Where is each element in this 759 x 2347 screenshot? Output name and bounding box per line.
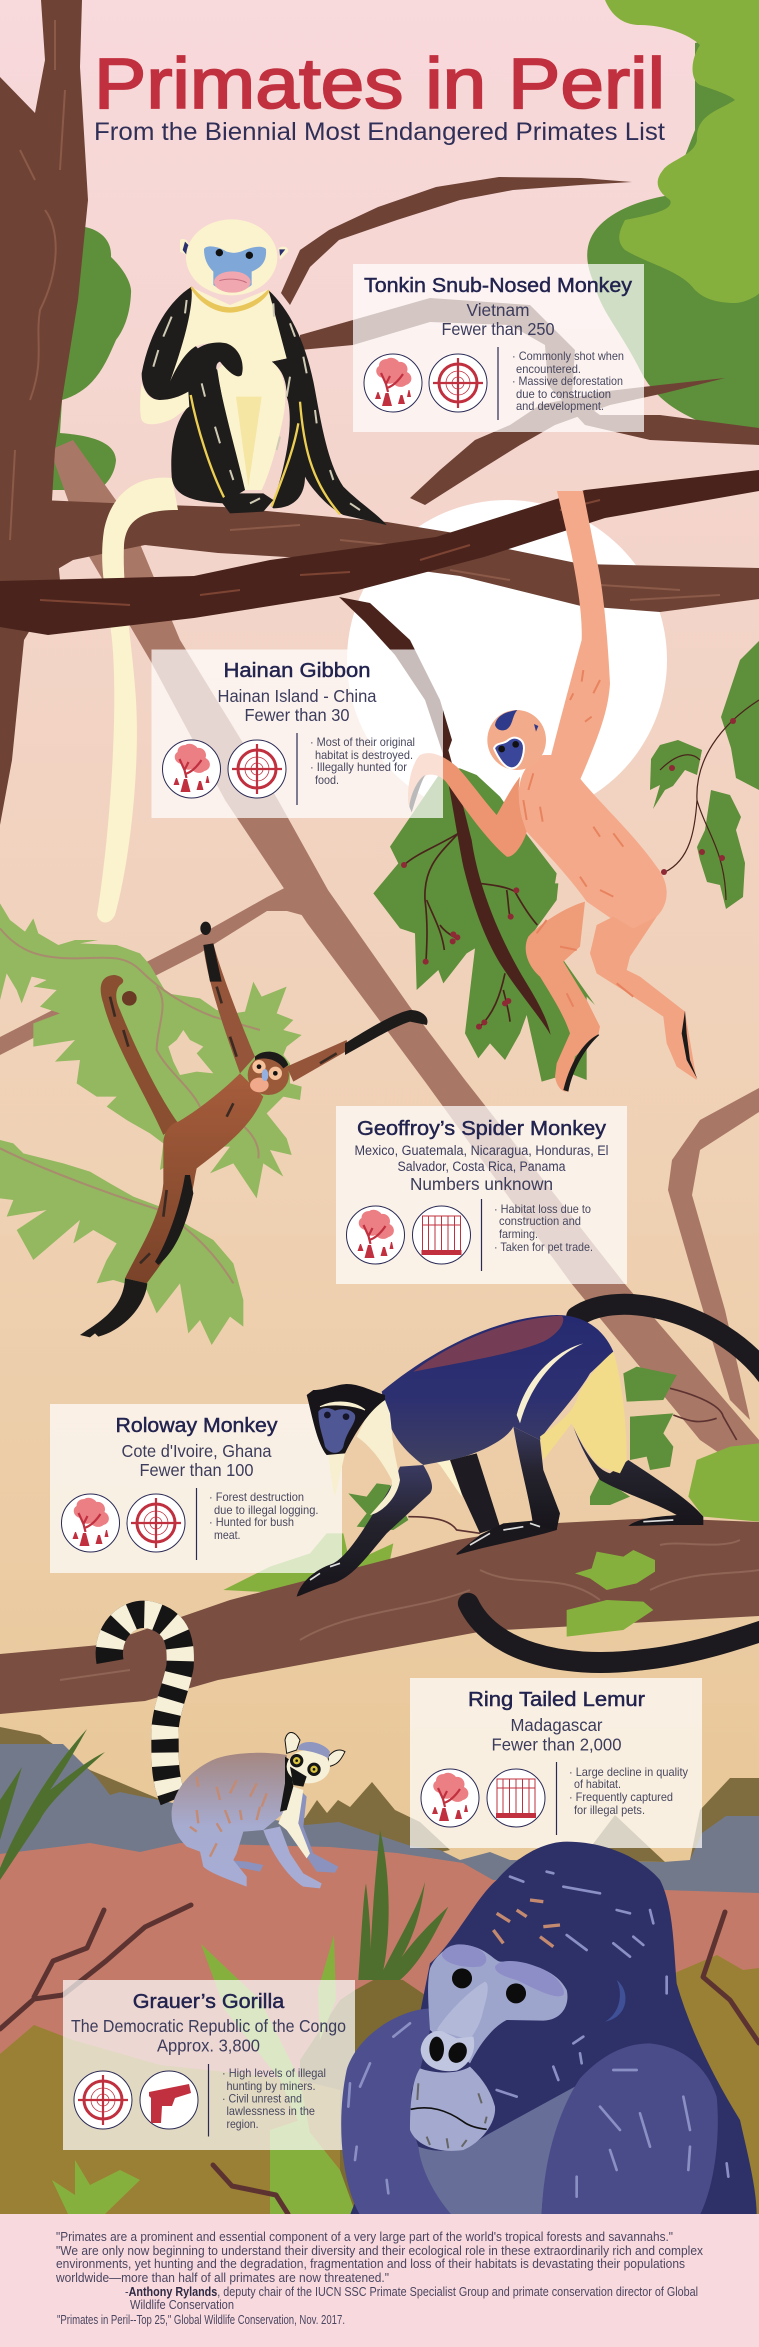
name: Hainan Gibbon [224, 660, 370, 682]
spider black arm [345, 1010, 428, 1055]
footer quote: "Primates are a prominent and essential component of a very large part of the world's tropical forests and savannahs." [56, 2230, 673, 2244]
lemur muzzle [290, 1767, 307, 1787]
ring tailed lemur [109, 1614, 345, 1888]
gibbon nails [409, 775, 697, 1092]
gibbon fur [523, 670, 633, 1007]
gibbon twigs [401, 833, 537, 1030]
location: Hainan Island - China [218, 686, 377, 706]
tree foliage: top right [587, 0, 759, 440]
icon: cage [412, 1206, 470, 1264]
tonkin yellow stripes [191, 395, 340, 514]
threats: · Taken for pet trade. [494, 1240, 593, 1254]
ground: back hills [0, 1727, 759, 1900]
icon: deforestation [62, 1494, 120, 1552]
lemur cap [298, 1742, 330, 1758]
name: Tonkin Snub-Nosed Monkey [364, 275, 632, 297]
lemur ears [285, 1732, 345, 1767]
tonkin eyes [219, 253, 249, 255]
gorilla nose bridge [437, 1982, 488, 2040]
roloway torso [382, 1315, 613, 1465]
roloway white stripe [517, 1343, 583, 1423]
name: Geoffroy’s Spider Monkey [357, 1118, 606, 1140]
gorilla brow [442, 1944, 564, 1996]
roloway white leg strip [433, 1460, 462, 1497]
threats: · Massive deforestation [512, 374, 623, 388]
threats: farming. [499, 1227, 538, 1241]
roloway monkey [297, 1304, 759, 1663]
threats [209, 1490, 318, 1542]
spider raised arm [203, 943, 255, 1073]
gibbon branch [443, 733, 551, 1035]
footer source: "Primates in Peril--Top 25," Global Wildlife Conservation, Nov. 2017. [57, 2313, 345, 2327]
tonkin head [186, 219, 277, 295]
upper branches [281, 177, 759, 505]
roloway yellow rump [540, 1352, 627, 1473]
lemur pupils [297, 1761, 314, 1769]
threats: · Hunted for bush [209, 1515, 294, 1529]
location: Madagascar [510, 1715, 603, 1735]
panel: ring tailed lemur [410, 1678, 702, 1848]
threats [494, 1202, 593, 1254]
right berries stem [660, 700, 759, 900]
gorilla muzzle [410, 2067, 495, 2151]
threats: construction and [499, 1214, 581, 1228]
gorilla mouth [411, 2108, 487, 2129]
title: Primates in Peril [94, 45, 665, 124]
lemur front leg [263, 1827, 322, 1888]
icon: deforestation [364, 354, 422, 412]
panel: tonkin snub-nosed monkey [353, 264, 644, 432]
tree foliage: left [0, 200, 131, 490]
hainan gibbon with leaf cluster [373, 491, 697, 1092]
panel background [410, 1678, 702, 1848]
roloway front arm [297, 1465, 432, 1597]
roloway rear leg [573, 1427, 703, 1526]
gorilla face [428, 1945, 567, 2063]
gibbon crown [495, 710, 517, 730]
footer quote: "We are only now beginning to understand their diversity and their ecological role in these extraordinarily rich and complex [56, 2244, 704, 2258]
tonkin collar [191, 286, 269, 313]
spider black foot [80, 1278, 147, 1337]
panel: roloway monkey [50, 1404, 342, 1573]
ground: olive right [660, 1955, 759, 2214]
main trunk [0, 0, 88, 825]
panel: grauer's gorilla [63, 1980, 355, 2150]
icon: hunting target [127, 1494, 185, 1552]
roloway eyes [327, 1415, 346, 1417]
divider [556, 1762, 558, 1835]
name: Ring Tailed Lemur [468, 1689, 645, 1711]
gorilla ear [605, 1980, 626, 2022]
count: Fewer than 2,000 [492, 1734, 622, 1754]
lemur hind foot [227, 1860, 263, 1872]
light side branches [0, 880, 759, 1420]
lemur collar [280, 1757, 293, 1812]
gibbon eyes [502, 744, 516, 749]
roloway face [318, 1408, 355, 1453]
fern leaves [0, 903, 302, 1345]
gibbon near arm [408, 753, 527, 857]
roloway head [307, 1384, 385, 1455]
subtitle: From the Biennial Most Endangered Primates List [94, 118, 665, 146]
icon: deforestation [346, 1206, 404, 1264]
location: Cote d'Ivoire, Ghana [122, 1441, 272, 1461]
panel background [353, 264, 644, 432]
spider cap [255, 1052, 288, 1068]
footer quote: environments, yet hunting and the degradation, fragmentation and loss of their habitats is devastating their populations [56, 2257, 685, 2271]
tonkin left side black [142, 287, 245, 503]
gibbon back leg [526, 902, 600, 1092]
gorilla head and back [350, 1842, 757, 2215]
tonkin left hand [140, 383, 189, 424]
lemur head [287, 1750, 330, 1783]
threats: of habitat. [574, 1777, 621, 1791]
spider monkey [80, 922, 428, 1337]
icon: hunting target [228, 740, 286, 798]
threats [512, 349, 624, 413]
grauer's gorilla [341, 1842, 757, 2215]
footer quote [55, 2230, 704, 2285]
tonkin right side black [268, 290, 387, 525]
gorilla right arm [542, 2043, 718, 2215]
threats: due to illegal logging. [214, 1503, 318, 1517]
threats: hunting by miners. [226, 2079, 316, 2093]
divider [497, 347, 499, 420]
threats: meat. [214, 1528, 240, 1542]
location [354, 1143, 608, 1174]
threats: region. [226, 2117, 258, 2131]
gibbon face mask [494, 738, 524, 768]
threats: and development. [516, 399, 604, 413]
location: Salvador, Costa Rica, Panama [398, 1159, 566, 1174]
panel background [50, 1404, 342, 1573]
footer attribution [125, 2285, 698, 2312]
threats: · Commonly shot when [512, 349, 624, 363]
spider tail wrap [101, 975, 178, 1135]
name: Roloway Monkey [116, 1415, 278, 1437]
twigs [0, 1905, 759, 2214]
panel background [152, 650, 443, 818]
spider nose [262, 1069, 268, 1081]
right leaves [650, 641, 759, 909]
tonkin belly glow [236, 397, 262, 487]
roloway foot [457, 1513, 558, 1555]
footer attribution: -Anthony Rylands, deputy chair of the IUCN SSC Primate Specialist Group and primate conservation director of Global [125, 2285, 698, 2299]
icon: deforestation [421, 1769, 479, 1827]
lemur body [172, 1753, 290, 1887]
ground: terracotta [0, 1843, 759, 2214]
roloway beard [328, 1453, 345, 1497]
count: Fewer than 100 [140, 1460, 254, 1480]
footer attribution: Wildlife Conservation [130, 2298, 234, 2312]
spider body [125, 1073, 263, 1283]
gorilla muzzle grain [417, 2083, 487, 2148]
threats: · Large decline in quality [569, 1765, 688, 1779]
count: Fewer than 250 [442, 319, 555, 339]
bark on mid branch [230, 525, 720, 600]
roloway far leg [450, 1453, 500, 1533]
sun [347, 500, 667, 820]
tonkin tail [97, 478, 178, 922]
roloway middle leg [513, 1427, 560, 1530]
location: Mexico, Guatemala, Nicaragua, Honduras, El [354, 1143, 608, 1158]
gorilla chest [418, 2078, 590, 2215]
roloway chest [357, 1400, 400, 1515]
threats: · Frequently captured [569, 1790, 673, 1804]
gorilla nose [421, 2031, 474, 2071]
icon: deforestation [162, 740, 220, 798]
threats: food. [315, 773, 339, 787]
threats: · Forest destruction [209, 1490, 304, 1504]
panel background [63, 1980, 355, 2150]
footer quote: worldwide—more than half of all primates are now threatened." [55, 2271, 389, 2285]
threats: lawlessness in the [226, 2104, 315, 2118]
roloway maroon back [413, 1316, 563, 1372]
tonkin mouth [214, 271, 251, 293]
threats: · Habitat loss due to [494, 1202, 591, 1216]
gorilla left shoulder [341, 2008, 452, 2215]
spider eyes [252, 1060, 282, 1080]
spider black hand [200, 922, 222, 982]
tonkin ear inner [183, 242, 285, 256]
name: Grauer’s Gorilla [133, 1991, 285, 2013]
spider muzzle [250, 1078, 269, 1092]
threats: · High levels of illegal [222, 2066, 326, 2080]
divider [296, 733, 298, 805]
dark main branch [0, 470, 759, 635]
location: Vietnam [466, 300, 530, 320]
threats: · Civil unrest and [222, 2092, 302, 2106]
branch grain [60, 1540, 759, 1680]
gibbon leaf [373, 768, 595, 1082]
bark marks [10, 20, 65, 540]
gibbon head [487, 710, 546, 770]
spider head [248, 1055, 289, 1095]
panel: hainan gibbon [152, 650, 443, 818]
lemur eyes [297, 1761, 314, 1769]
panel background [336, 1106, 627, 1284]
gibbon ear [534, 724, 538, 732]
spider right arm [287, 1040, 348, 1082]
lemur tail [109, 1614, 180, 1800]
leaves on branch [567, 1550, 655, 1637]
dark grass [0, 1729, 448, 1980]
tonkin belly [170, 287, 287, 490]
ground: olive left [0, 2025, 340, 2214]
tonkin feet [220, 493, 273, 513]
ground: grey layer [0, 1744, 759, 1900]
icon: cage [487, 1769, 545, 1827]
spider tail curl [122, 991, 137, 1006]
ground: dark mound [300, 1978, 450, 2214]
spider dark flecks [110, 987, 337, 1263]
light grass [52, 1935, 356, 2214]
branch marks [40, 500, 600, 605]
count: Fewer than 30 [244, 705, 350, 725]
divider [208, 2064, 210, 2136]
tonkin snub-nosed monkey [140, 219, 387, 525]
gorilla light fur [348, 1872, 728, 2197]
background bushes at lower branch [223, 1367, 759, 1593]
threats: encountered. [516, 362, 581, 376]
lemur eye patches [297, 1761, 314, 1769]
gibbon torso [518, 755, 667, 929]
mid brown branch [10, 500, 759, 612]
lemur fur [190, 1777, 267, 1857]
location: The Democratic Republic of the Congo [71, 2016, 346, 2036]
tonkin flecks [153, 300, 360, 510]
tonkin forearm [160, 342, 245, 500]
gorilla orange fur [493, 1900, 560, 1947]
tonkin ears [180, 239, 288, 260]
threats: · Most of their original [310, 735, 415, 749]
tonkin face [204, 246, 266, 291]
divider [196, 1488, 198, 1560]
threats: habitat is destroyed. [315, 748, 413, 762]
count: Approx. 3,800 [157, 2036, 260, 2056]
threats [310, 735, 415, 787]
icon: handgun [140, 2071, 198, 2129]
roloway hand flecks [310, 1520, 673, 1580]
threats: due to construction [516, 387, 611, 401]
roloway brow [320, 1402, 365, 1410]
dark limb down to gibbon [339, 597, 452, 760]
count: Numbers unknown [410, 1174, 553, 1194]
gibbon front leg [590, 917, 697, 1080]
tonkin mouth line [219, 279, 247, 283]
threats: for illegal pets. [574, 1803, 645, 1817]
lemur far leg [298, 1790, 338, 1873]
threats: · Illegally hunted for [310, 760, 407, 774]
threats [222, 2066, 326, 2131]
light diagonal branch [50, 440, 759, 1480]
gorilla eyes [462, 1978, 516, 1993]
panel: geoffroy's spider monkey [336, 1106, 627, 1284]
roloway tail [468, 1304, 759, 1663]
divider [480, 1199, 482, 1271]
lemur arm [278, 1787, 310, 1858]
gibbon raised arm [550, 491, 610, 780]
icon: hunting target [74, 2071, 132, 2129]
threats [569, 1765, 688, 1817]
gorilla nostrils [429, 2037, 444, 2061]
footer band [0, 2214, 759, 2347]
lower branch [0, 1518, 759, 1714]
spider black leg stripe [155, 1175, 193, 1265]
icon: hunting target [429, 354, 487, 412]
